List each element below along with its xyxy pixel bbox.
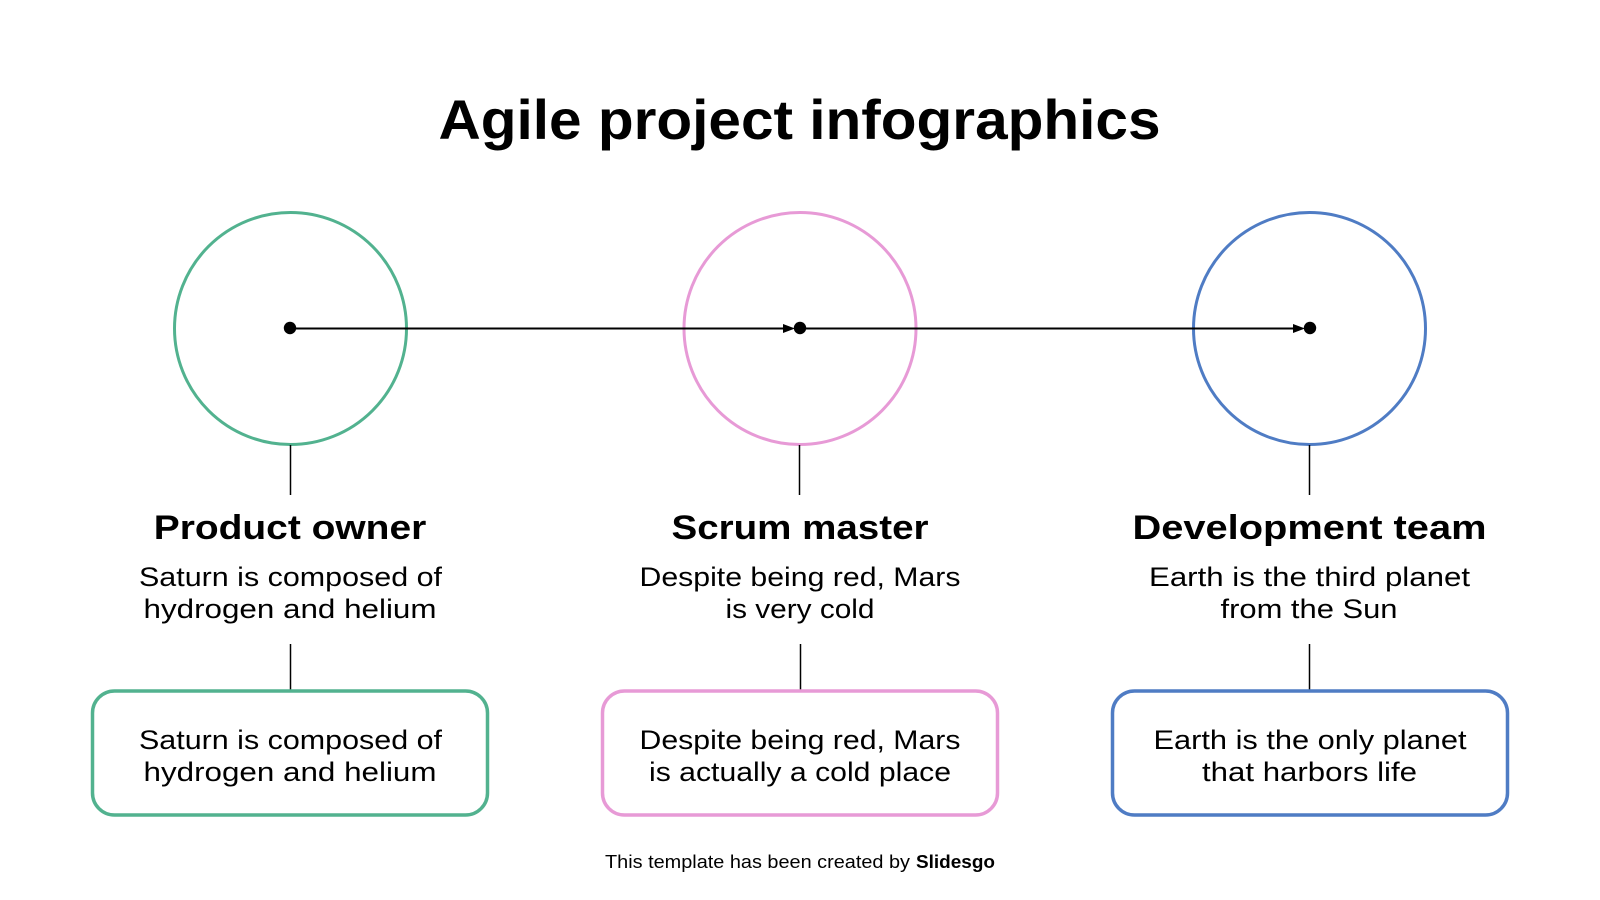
- text block: development team description: Earth is the third planet: [1149, 562, 1471, 592]
- circle: scrum master: [684, 212, 916, 444]
- panel: development team box: [1112, 691, 1508, 815]
- panel: product owner box: [92, 691, 488, 815]
- heading: development team: Development team: [1132, 509, 1486, 547]
- text block: development team box text: that harbors life: [1202, 757, 1417, 787]
- text block: product owner box text: [139, 725, 443, 787]
- column: development team: [1112, 445, 1508, 815]
- text block: development team box text: [1154, 725, 1467, 787]
- column: product owner: [92, 445, 488, 815]
- circle: development team: [1194, 212, 1426, 444]
- title: Agile project infographics: [438, 88, 1160, 151]
- text block: scrum master description: [640, 562, 960, 624]
- arrow: scrum master to development team: [800, 324, 1305, 333]
- text block: product owner description: hydrogen and helium: [144, 594, 436, 624]
- circle: product owner: [174, 212, 406, 444]
- text block: development team description: [1149, 562, 1471, 624]
- text block: scrum master description: is very cold: [726, 594, 874, 624]
- text block: scrum master box text: [640, 725, 960, 787]
- dot: product owner: [284, 322, 296, 334]
- dot: development team: [1304, 322, 1316, 334]
- footer credit: Slidesgo: [916, 852, 995, 872]
- text block: product owner description: Saturn is composed of: [139, 562, 443, 592]
- footer credit: This template has been created by: [605, 852, 910, 872]
- panel: scrum master box: [602, 691, 998, 815]
- text block: scrum master description: Despite being red, Mars: [640, 562, 960, 592]
- text block: development team box text: Earth is the only planet: [1154, 725, 1467, 755]
- heading: product owner: Product owner: [154, 509, 426, 547]
- text block: development team description: from the Sun: [1220, 594, 1398, 624]
- dot: scrum master: [794, 322, 806, 334]
- text block: product owner description: [139, 562, 443, 624]
- text block: scrum master box text: Despite being red, Mars: [640, 725, 960, 755]
- text block: scrum master box text: is actually a cold place: [649, 757, 951, 787]
- arrow: product owner to scrum master: [290, 324, 795, 333]
- column: scrum master: [602, 445, 998, 815]
- text block: product owner box text: Saturn is composed of: [139, 725, 443, 755]
- heading: scrum master: Scrum master: [672, 509, 928, 547]
- text block: product owner box text: hydrogen and helium: [144, 757, 436, 787]
